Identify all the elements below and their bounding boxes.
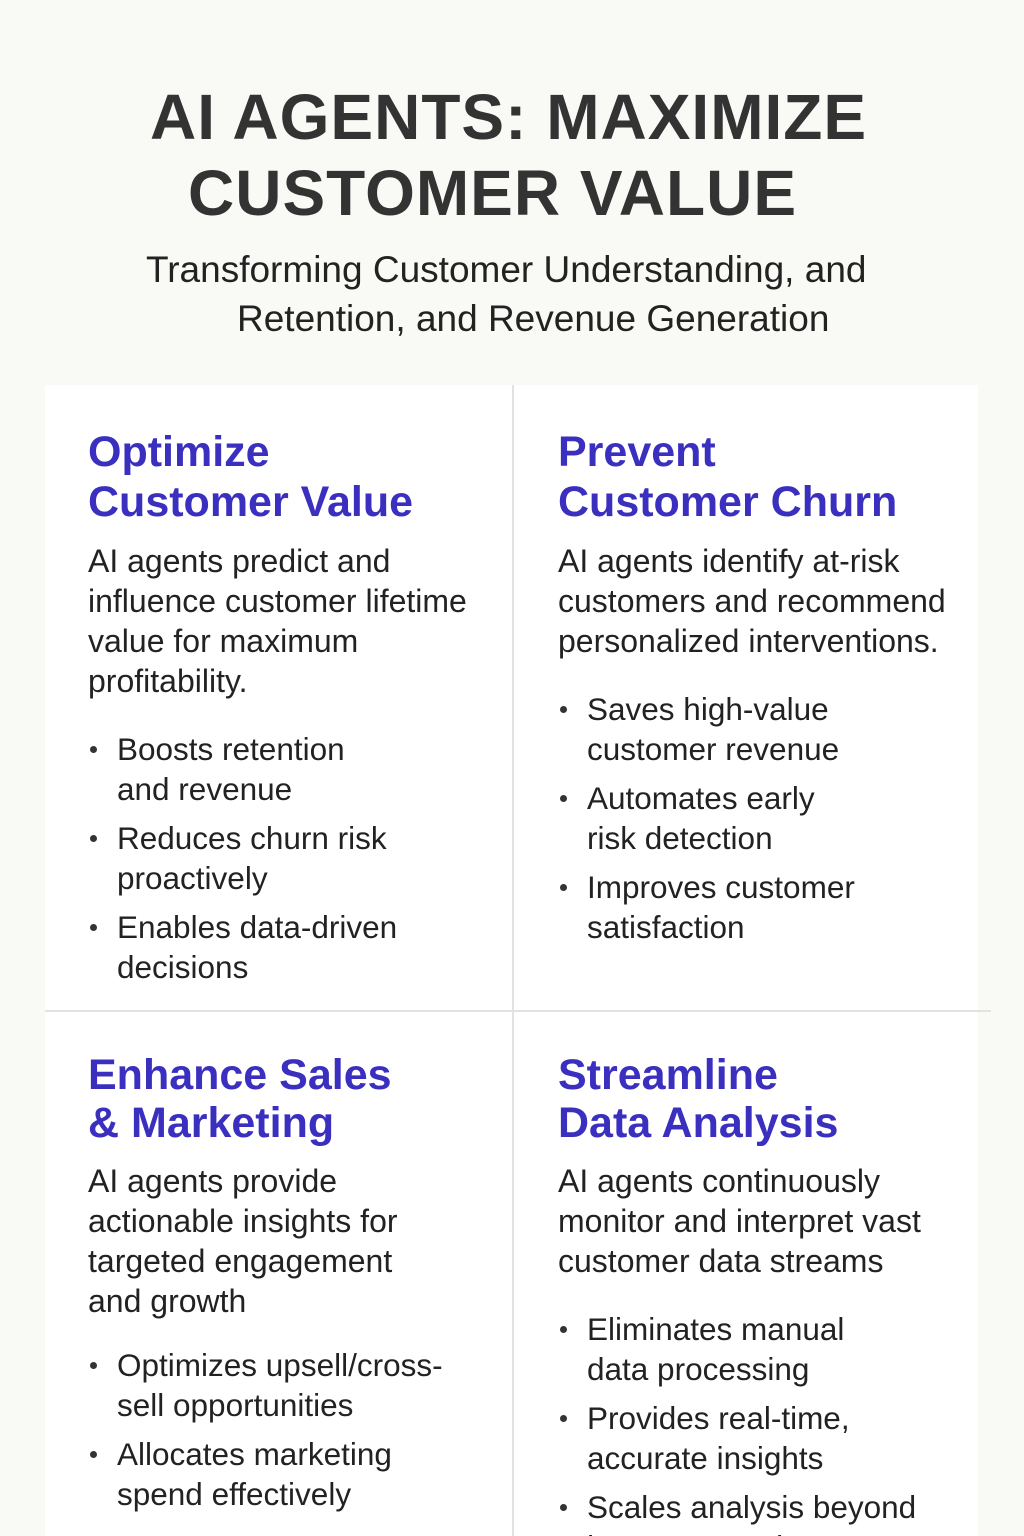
- heading: Optimize: [88, 428, 270, 476]
- bullets: Boosts retention: [117, 731, 345, 767]
- heading: Streamline: [558, 1051, 778, 1099]
- subtitle: Transforming Customer Understanding, and: [146, 249, 866, 290]
- description: AI agents provide: [88, 1163, 337, 1199]
- bullets: Automates early: [587, 780, 815, 816]
- description: targeted engagement: [88, 1243, 392, 1279]
- subtitle: [146, 249, 866, 339]
- bullets: Saves high-value: [587, 691, 829, 727]
- panel: prevent customer churn: [558, 428, 946, 945]
- bullets: [560, 1311, 916, 1536]
- description: and growth: [88, 1283, 246, 1319]
- bullets: Improves customer: [587, 869, 855, 905]
- description: customer data streams: [558, 1243, 883, 1279]
- heading: [88, 428, 413, 526]
- description: [88, 543, 467, 699]
- bullets: satisfaction: [587, 909, 745, 945]
- bullets: Eliminates manual: [587, 1311, 844, 1347]
- description: [88, 1163, 398, 1319]
- bullets: Provides real-time,: [587, 1400, 850, 1436]
- bullets: [90, 1347, 443, 1512]
- bullets: customer revenue: [587, 731, 839, 767]
- description: influence customer lifetime: [88, 583, 467, 619]
- bullets: proactively: [117, 860, 268, 896]
- heading: [88, 1051, 392, 1147]
- bullets: data processing: [587, 1351, 809, 1387]
- panel: optimize customer value: [88, 428, 467, 985]
- subtitle: Retention, and Revenue Generation: [237, 298, 829, 339]
- heading: & Marketing: [88, 1099, 334, 1147]
- title: AI AGENTS: MAXIMIZE: [150, 81, 867, 153]
- heading: [558, 1051, 838, 1147]
- title: [150, 81, 867, 229]
- heading: Data Analysis: [558, 1099, 838, 1147]
- description: AI agents continuously: [558, 1163, 880, 1199]
- heading: Customer Churn: [558, 478, 897, 526]
- description: AI agents predict and: [88, 543, 390, 579]
- heading: Customer Value: [88, 478, 413, 526]
- bullets: Reduces churn risk: [117, 820, 387, 856]
- description: profitability.: [88, 663, 247, 699]
- description: personalized interventions.: [558, 623, 939, 659]
- bullets: spend effectively: [117, 1476, 351, 1512]
- bullets: decisions: [117, 949, 248, 985]
- description: [558, 1163, 921, 1279]
- bullets: risk detection: [587, 820, 773, 856]
- bullets: and revenue: [117, 771, 292, 807]
- heading: Prevent: [558, 428, 716, 476]
- description: monitor and interpret vast: [558, 1203, 921, 1239]
- bullets: Scales analysis beyond: [587, 1489, 916, 1525]
- panel grid background: [45, 385, 978, 1536]
- description: value for maximum: [88, 623, 358, 659]
- panel: enhance sales & marketing: [88, 1051, 443, 1512]
- panel: streamline data analysis: [558, 1051, 921, 1536]
- title: CUSTOMER VALUE: [188, 157, 797, 229]
- bullets: [90, 731, 397, 985]
- description: [558, 543, 946, 659]
- heading: Enhance Sales: [88, 1051, 392, 1099]
- bullets: [560, 691, 855, 945]
- bullets: accurate insights: [587, 1440, 823, 1476]
- heading: [558, 428, 897, 526]
- description: actionable insights for: [88, 1203, 398, 1239]
- bullets: sell opportunities: [117, 1387, 353, 1423]
- bullets: Enables data-driven: [117, 909, 397, 945]
- description: customers and recommend: [558, 583, 946, 619]
- description: AI agents identify at-risk: [558, 543, 899, 579]
- bullets: Optimizes upsell/cross-: [117, 1347, 443, 1383]
- bullets: Allocates marketing: [117, 1436, 392, 1472]
